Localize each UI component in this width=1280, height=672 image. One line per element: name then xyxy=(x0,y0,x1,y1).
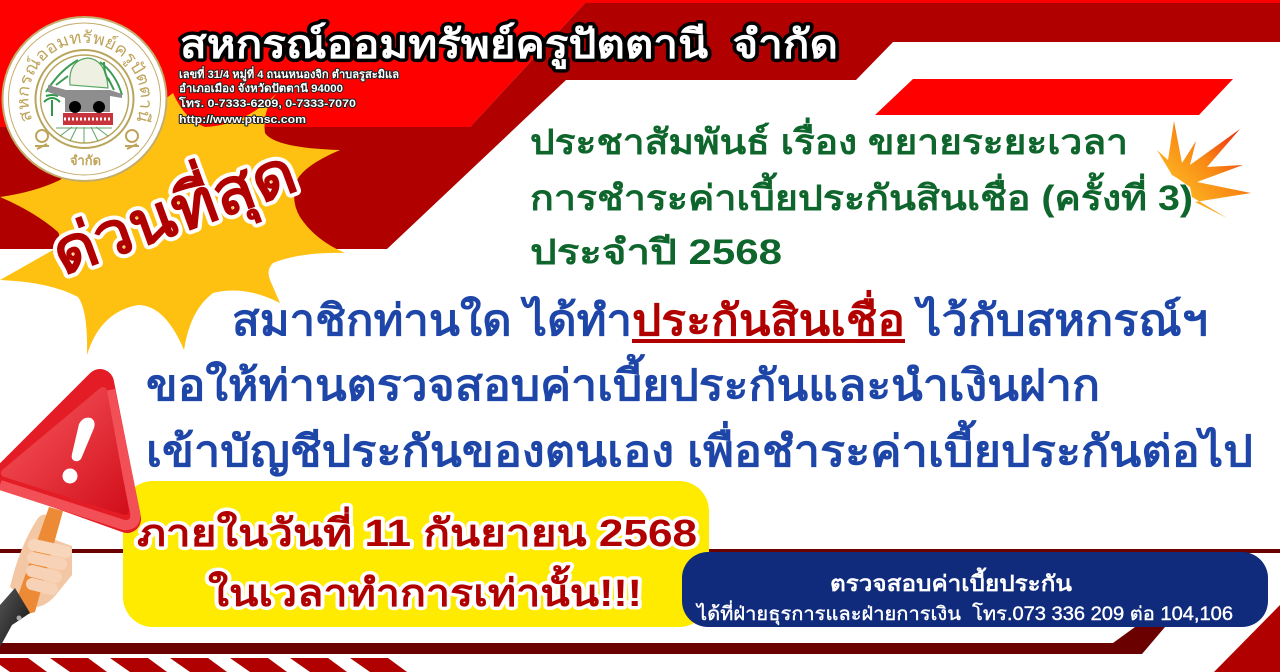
announcement heading: ประชาสัมพันธ์ เรื่อง ขยายระยะเวลา xyxy=(530,117,1128,162)
announcement heading: ประจำปี 2568 xyxy=(530,233,782,272)
address block: อำเภอเมือง จังหวัดปัตตานี 94000 xyxy=(179,82,343,95)
address block: โทร. 0-7333-6209, 0-7333-7070 xyxy=(178,96,356,110)
thin dark rules xyxy=(0,549,1280,553)
header background: red band xyxy=(0,0,1280,127)
corner triangle xyxy=(1214,605,1280,672)
icon: spark burst xyxy=(1157,121,1251,218)
sign stick xyxy=(13,507,63,616)
sleeve xyxy=(0,588,30,647)
logo dome and plants xyxy=(70,58,108,88)
announcement heading: การชำระค่าเบี้ยประกันสินเชื่อ (ครั้งที่ 3) xyxy=(530,172,1193,218)
deadline callout: ในเวลาทำการเท่านั้น!!! xyxy=(208,565,642,615)
contact pill: ตรวจสอบค่าเบี้ยประกัน xyxy=(830,567,1072,596)
logo cannon xyxy=(48,85,122,112)
body text: ประกันสินเชื่อ xyxy=(632,290,905,345)
address block: เลขที่ 31/4 หมู่ที่ 4 ถนนหนองจิก ตำบลรูสะมิแล xyxy=(179,66,399,82)
deadline callout: ภายในวันที่ 11 กันยายน 2568 xyxy=(137,506,697,555)
announcement heading xyxy=(530,117,1193,272)
sign face xyxy=(5,391,125,511)
logo red brick base xyxy=(63,113,113,125)
logo lower text: จำกัด xyxy=(70,153,101,168)
body text: ขอให้ท่านตรวจสอบค่าเบี้ยประกันและนำเงินฝาก xyxy=(146,353,1100,410)
address block xyxy=(178,66,399,126)
body text xyxy=(146,290,1253,477)
logo side emblems xyxy=(35,130,139,149)
body text: เข้าบัญชีประกันของตนเอง เพื่อชำระค่าเบี้ยประกันต่อไป xyxy=(146,419,1253,477)
contact pill: ได้ที่ฝ่ายธุรการและฝ่ายการเงิน โทร.073 336 209 ต่อ 104,106 xyxy=(695,600,1233,626)
address block: http://www.ptnsc.com xyxy=(179,114,306,126)
hazard stripes xyxy=(0,658,407,672)
triangle sign frame xyxy=(7,383,127,519)
exclamation mark xyxy=(62,418,95,484)
header background: dark red band xyxy=(0,3,1280,249)
logo palm tree xyxy=(44,95,60,116)
red parallelogram accent xyxy=(875,79,1233,115)
sign lighter right and bottom border xyxy=(0,390,135,525)
deadline callout xyxy=(123,481,709,627)
organization title: สหกรณ์ออมทรัพย์ครูปัตตานี จำกัด xyxy=(180,22,838,69)
fingers xyxy=(32,545,66,589)
body text: สมาชิกท่านใด ได้ทำ xyxy=(232,295,632,345)
icon: hand holding warning sign xyxy=(0,383,135,647)
body text: ไว้กับสหกรณ์ฯ xyxy=(914,295,1208,345)
logo ring text: สหกรณ์ออมทรัพย์ครูปัตตานี xyxy=(19,30,152,122)
contact pill xyxy=(682,552,1268,627)
lower dark red bar xyxy=(0,627,1165,654)
urgent label: ด่วนที่สุด xyxy=(39,127,307,293)
back of hand xyxy=(10,514,72,607)
logo seal xyxy=(2,16,168,182)
yellow starburst xyxy=(0,93,345,355)
cuff button xyxy=(16,616,22,620)
